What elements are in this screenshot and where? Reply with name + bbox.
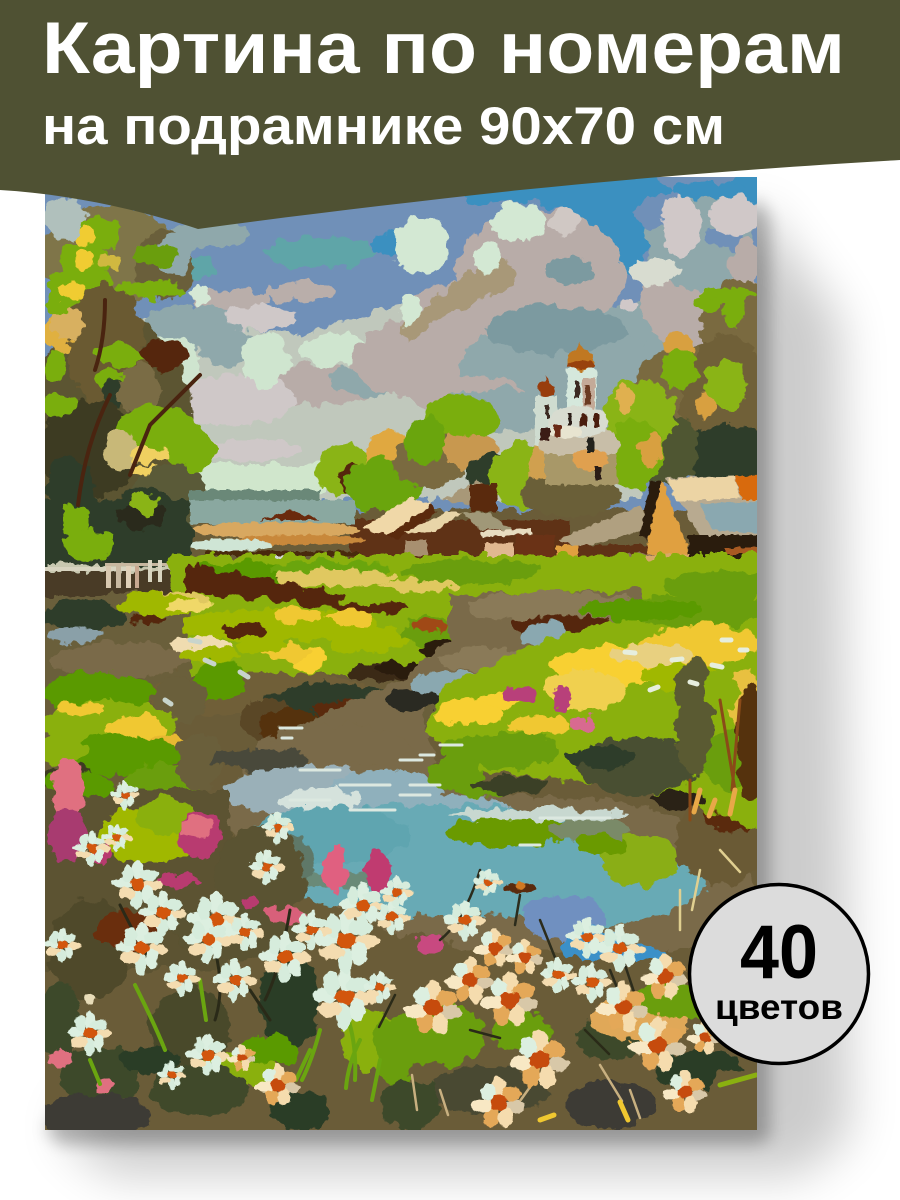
painting: landscape with river and church <box>45 177 757 1130</box>
river view far bank <box>190 490 320 500</box>
distant trees and church backdrop <box>315 280 780 517</box>
village houses <box>188 474 757 562</box>
daisies <box>44 781 723 1128</box>
main cloud <box>452 207 628 313</box>
right clouds <box>640 278 757 347</box>
right bank <box>425 568 757 830</box>
badge: 40 colours <box>690 884 868 1064</box>
river and pond <box>210 590 765 978</box>
badge number: 40 <box>740 910 818 995</box>
canvas drop shadow <box>45 198 850 1175</box>
church <box>535 341 620 485</box>
left tree <box>45 198 219 524</box>
header banner <box>0 0 900 229</box>
meadow details: flecks and stems <box>78 300 756 1120</box>
foreground meadow base <box>45 770 744 1130</box>
lower sky <box>130 305 640 500</box>
pink fireweed <box>46 760 444 1092</box>
meadow fields <box>45 550 757 792</box>
fence <box>45 560 175 588</box>
sky <box>45 177 757 515</box>
title line 1: Картина по номерам <box>42 8 845 89</box>
badge caption: цветов <box>715 988 843 1027</box>
title line 2: на подрамнике 90х70 см <box>42 97 725 156</box>
brown banks <box>246 670 308 678</box>
dark undergrowth left <box>30 495 190 598</box>
